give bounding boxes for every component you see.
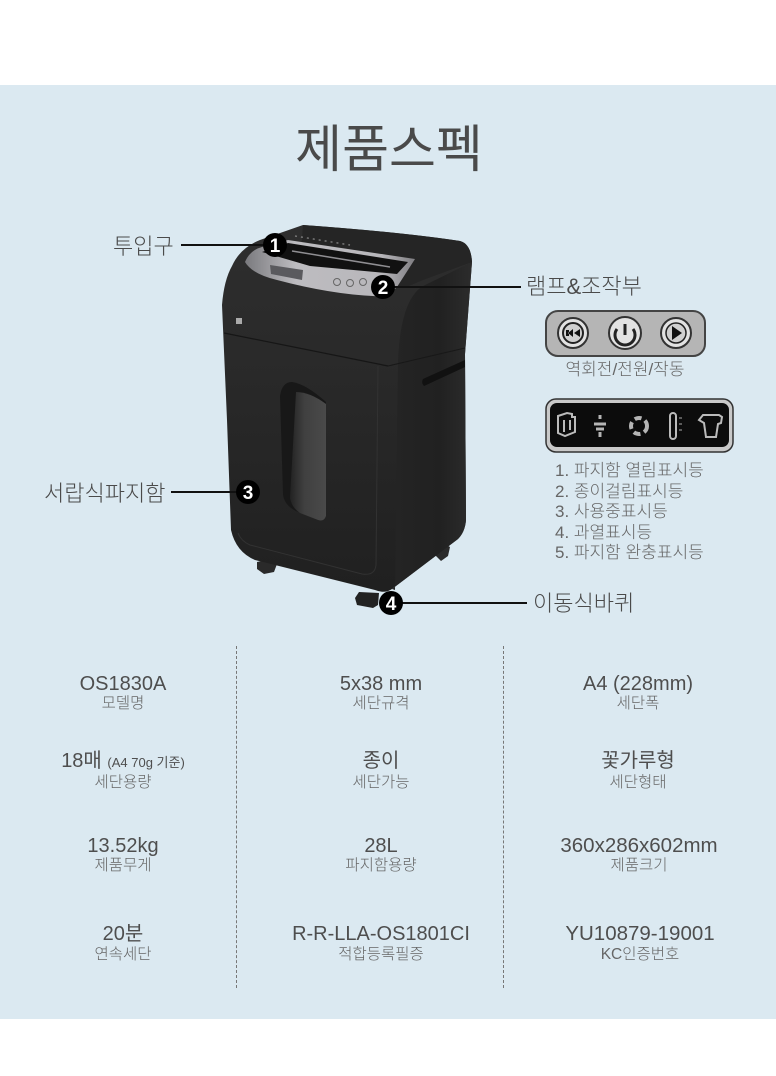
drawer outline — [238, 366, 378, 574]
spec: 세단가능: 종이 — [363, 750, 399, 772]
spec: 세단가능: 세단가능 — [352, 774, 410, 791]
marker 2: 2 — [378, 278, 388, 299]
icon: status lamps — [546, 399, 733, 452]
spec: 파지함용량: 파지함용량 — [345, 857, 417, 874]
list: 표시등: 1. 파지함 열림표시등 — [555, 461, 704, 480]
callout: 서랍식파지함: 서랍식파지함 — [44, 481, 165, 506]
spec: 적합등록필증: R-R-LLA-OS1801CI — [292, 923, 470, 945]
marker 3 — [236, 480, 260, 504]
spec: 세단폭: A4 (228mm) — [583, 673, 693, 695]
bin window — [280, 382, 326, 520]
marker 4 — [379, 591, 403, 615]
marker 3: 3 — [243, 483, 253, 504]
spec: 모델명 — [80, 673, 166, 712]
leader line: 램프 — [385, 286, 521, 288]
list: 표시등 — [555, 461, 704, 562]
spec: 제품크기 — [560, 834, 718, 874]
marker 1 — [263, 233, 287, 257]
spec: 세단용량: 18매 (A4 70g 기준) — [61, 750, 185, 772]
spec: 모델명: 모델명 — [102, 695, 144, 712]
spec: 연속세단: 20분 — [103, 923, 143, 945]
spec: 세단용량: 세단용량 — [94, 774, 152, 791]
spec: 세단형태 — [601, 750, 675, 791]
caption: 버튼: 역회전/전원/작동 — [566, 360, 684, 379]
spec: 연속세단: 연속세단 — [94, 946, 152, 963]
spec: 제품크기: 360x286x602mm — [560, 834, 718, 857]
spec: 세단용량 — [61, 750, 185, 791]
leader line: 서랍식 파지함 — [171, 491, 245, 493]
title: 제품스펙 — [295, 121, 483, 178]
list: 표시등: 2. 종이걸림표시등 — [555, 482, 683, 501]
callout: 이동식바퀴: 이동식바퀴 — [533, 591, 634, 616]
icon: control buttons — [546, 311, 705, 356]
callout: 투입구: 투입구 — [113, 234, 174, 259]
shredder body — [222, 225, 472, 592]
spec: 모델명: OS1830A — [80, 673, 166, 695]
spec: 세단규격: 세단규격 — [352, 695, 410, 712]
spec: 적합등록필증 — [292, 923, 470, 963]
list: 표시등: 5. 파지함 완충표시등 — [555, 543, 704, 562]
spec: 제품무게: 13.52kg — [87, 835, 159, 857]
logo — [236, 318, 242, 324]
spec: 파지함용량: 28L — [364, 835, 398, 857]
feed slot — [262, 243, 408, 274]
product diagram — [171, 225, 734, 615]
divider right — [503, 646, 504, 988]
list: 표시등: 4. 과열표시등 — [555, 523, 652, 542]
marker 2 — [371, 275, 395, 299]
side handle slot — [422, 360, 465, 386]
marker 1: 1 — [270, 236, 281, 257]
spec: KC인증번호: YU10879-19001 — [565, 922, 715, 945]
spec: 세단가능 — [352, 750, 410, 791]
wheels — [257, 544, 450, 608]
marker 4: 4 — [386, 594, 397, 615]
spec: KC인증번호: KC인증번호 — [601, 946, 679, 963]
spec: 제품무게: 제품무게 — [94, 857, 152, 874]
spec: 적합등록필증: 적합등록필증 — [338, 946, 424, 963]
spec: 세단형태: 꽃가루형 — [601, 750, 675, 772]
leader line: 투입구 — [181, 244, 270, 246]
metal control panel — [245, 240, 415, 296]
spec: 세단형태: 세단형태 — [609, 774, 667, 791]
spec: 파지함용량 — [345, 835, 417, 874]
spec: 세단폭: 세단폭 — [617, 695, 659, 712]
callout: 램프&조작부: 램프&조작부 — [526, 274, 642, 299]
spec: 세단규격: 5x38 mm — [340, 673, 422, 695]
spec: 세단폭 — [583, 673, 693, 712]
spec: 세단규격 — [340, 673, 422, 712]
spec: 제품크기: 제품크기 — [610, 857, 668, 874]
spec: 제품무게 — [87, 835, 159, 874]
list: 표시등: 3. 사용중표시등 — [555, 502, 668, 521]
spec: KC인증번호 — [565, 922, 715, 963]
divider left — [236, 646, 237, 988]
leader line: 바퀴 — [392, 602, 527, 604]
spec: 연속세단 — [94, 923, 152, 963]
